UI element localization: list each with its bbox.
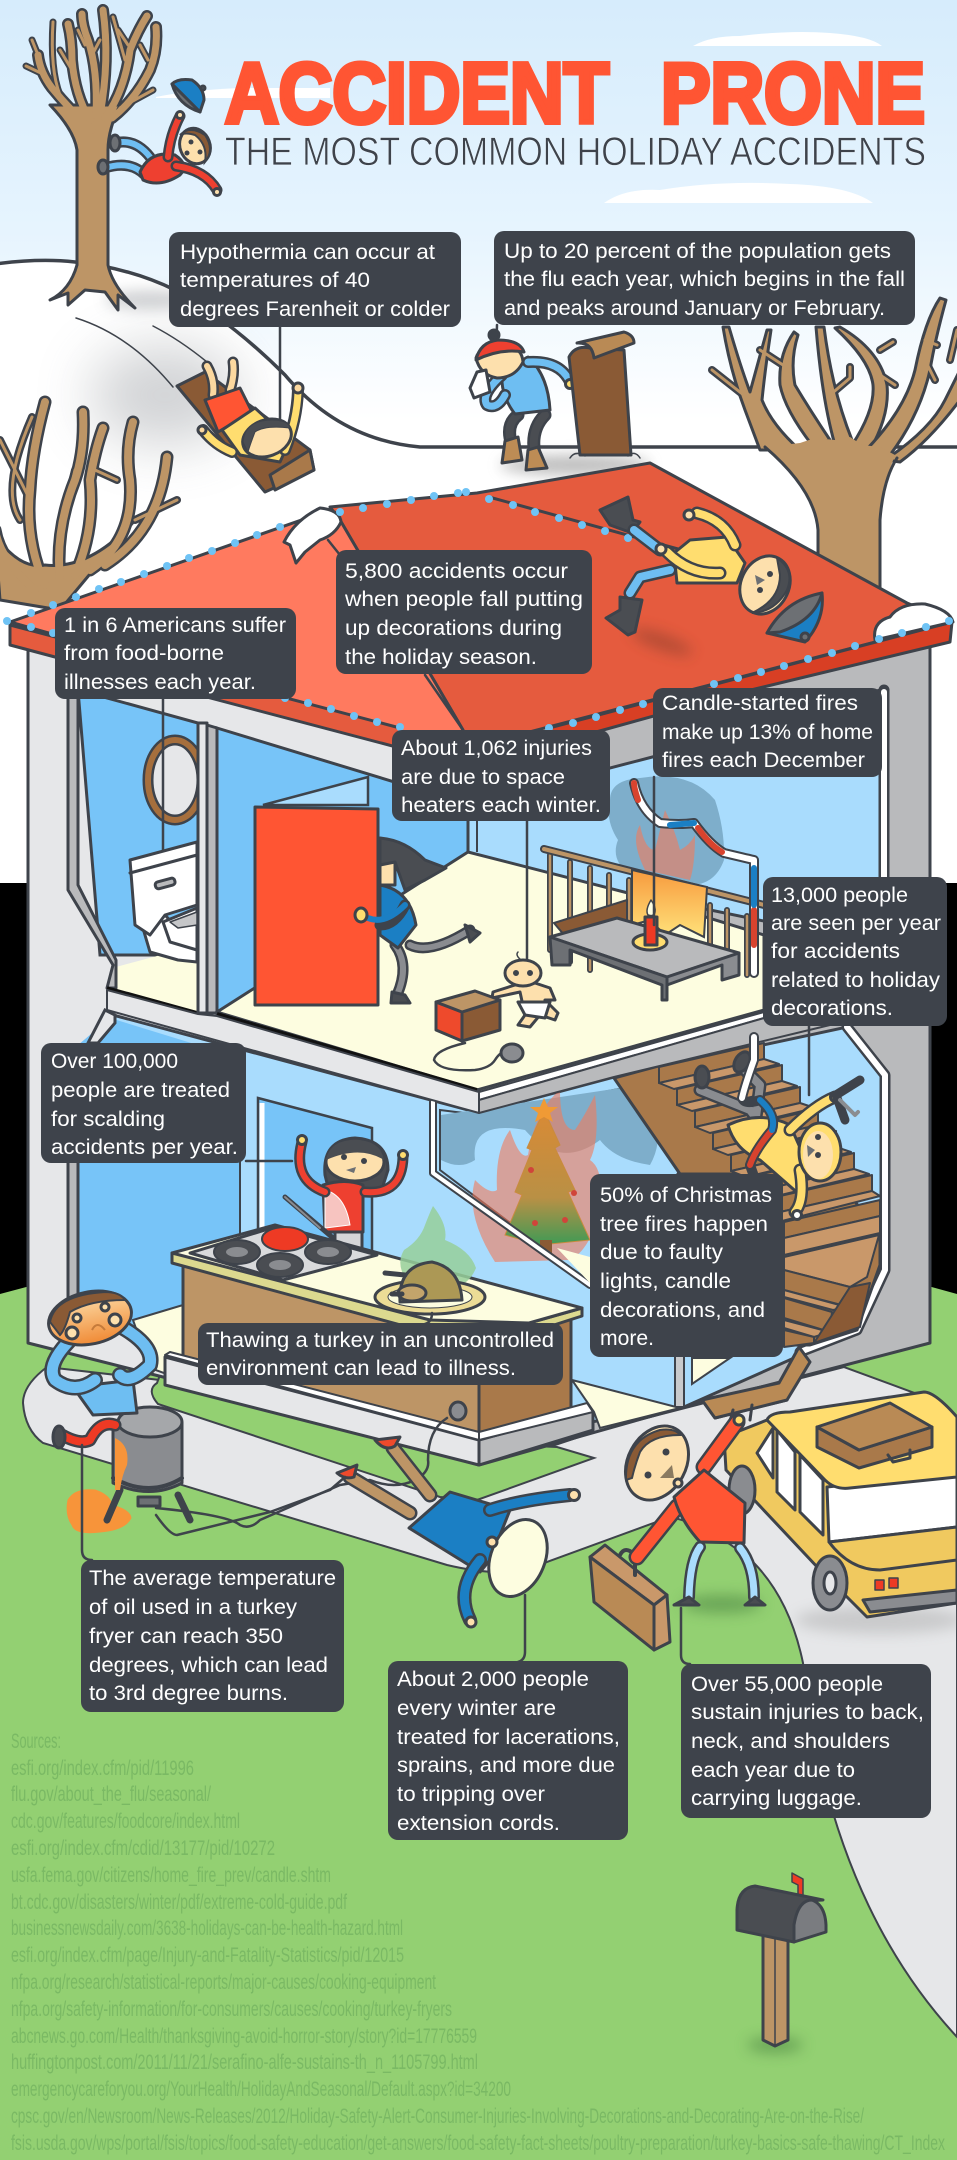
sources list: cdc.gov/features/foodcore/index.html bbox=[11, 1810, 240, 1833]
kitchen woman bbox=[285, 1136, 408, 1250]
bubble: hypothermia: temperatures of 40 bbox=[180, 269, 370, 292]
bubble: thawing turkey: environment can lead to illness. bbox=[206, 1357, 516, 1380]
stair railing bbox=[544, 849, 764, 975]
bubble: scalding: Over 100,000 bbox=[51, 1050, 178, 1073]
roof bbox=[10, 463, 952, 750]
baby bbox=[492, 952, 558, 1027]
bubble: luggage bbox=[681, 1664, 931, 1818]
cloud top right bbox=[693, 32, 882, 46]
lower suitcase bbox=[590, 1545, 670, 1650]
bubble: food-borne bbox=[55, 608, 296, 699]
bubble: 50 percent of tree fires: tree fires happen bbox=[600, 1213, 768, 1236]
sources list: nfpa.org/research/statistical-reports/major-causes/cooking-equipment bbox=[11, 1971, 436, 1994]
suitcase on car roof bbox=[817, 1403, 932, 1468]
bubble: extension cords: sprains, and more due bbox=[397, 1754, 615, 1777]
mailbox bbox=[737, 1873, 826, 2053]
bubble: space heaters: About 1,062 injuries bbox=[401, 737, 592, 760]
bubble: fryer oil bbox=[81, 1560, 344, 1712]
bubble: thawing turkey: Thawing a turkey in an uncontrolled bbox=[206, 1329, 554, 1352]
sources list bbox=[11, 1730, 945, 2155]
outlet and extension cord bbox=[156, 1402, 466, 1527]
sled tracks bbox=[76, 318, 207, 387]
tree: lower left bbox=[0, 402, 177, 610]
kitchen window bbox=[240, 1060, 372, 1295]
turkey fryer bbox=[107, 1407, 190, 1520]
floor slab bbox=[107, 990, 830, 1113]
bubble: decorations falls: the holiday season. bbox=[345, 646, 537, 669]
staircase bbox=[614, 1043, 880, 1347]
toboggan bbox=[569, 332, 640, 458]
roof snow bbox=[284, 508, 953, 640]
bubble: candle fires bbox=[653, 688, 882, 777]
bubble: extension cords: extension cords. bbox=[397, 1812, 560, 1835]
holiday garland bbox=[634, 783, 754, 973]
ground floor bbox=[133, 1305, 680, 1428]
bubble: holiday decorations: are seen per year bbox=[771, 912, 941, 935]
bubble: extension cords: every winter are bbox=[397, 1697, 556, 1720]
scared man bbox=[44, 1284, 151, 1448]
bubble: 50 percent of tree fires: decorations, and bbox=[600, 1299, 765, 1322]
title: Accident Prone: PRONE bbox=[661, 46, 925, 142]
bubble: hypothermia: degrees Farenheit or colder bbox=[180, 298, 450, 321]
bubble: thawing turkey bbox=[198, 1323, 563, 1385]
upper right wall trim bbox=[878, 690, 890, 940]
bubble: extension cords: to tripping over bbox=[397, 1783, 545, 1806]
counter and house base bbox=[165, 1352, 593, 1465]
cloud behind title bbox=[156, 88, 330, 98]
cloud lower right bbox=[604, 183, 873, 203]
car bbox=[724, 1392, 957, 1634]
sneezing man bbox=[470, 330, 650, 475]
bubble: hypothermia: Hypothermia can occur at bbox=[180, 241, 435, 264]
bubble: food-borne: 1 in 6 Americans suffer bbox=[64, 614, 286, 637]
stairs door frame bbox=[675, 1355, 730, 1407]
bubble: fryer oil: to 3rd degree burns. bbox=[89, 1682, 288, 1705]
bubble: scalding bbox=[41, 1043, 246, 1163]
house walls bbox=[28, 640, 930, 1465]
bubble: luggage: carrying luggage. bbox=[691, 1787, 862, 1810]
lower floor walls bbox=[68, 1010, 885, 1440]
doorway with smoke and burning tree bbox=[433, 1085, 680, 1285]
sources list: bt.cdc.gov/disasters/winter/pdf/extreme-cold-guide.pdf bbox=[11, 1891, 347, 1914]
bubble: flu: the flu each year, which begins in the fall bbox=[504, 268, 905, 291]
sky background bbox=[0, 0, 957, 420]
bubble: space heaters: are due to space bbox=[401, 766, 565, 789]
bubble: food-borne: illnesses each year. bbox=[64, 671, 256, 694]
bubble: decorations falls: 5,800 accidents occur bbox=[345, 560, 568, 583]
man falling down stairs bbox=[695, 1049, 860, 1220]
man falling from tree bbox=[98, 112, 220, 196]
sources list: usfa.fema.gov/citizens/home_fire_prev/candle.shtm bbox=[11, 1864, 331, 1887]
bubble: decorations falls: when people fall putting bbox=[344, 588, 583, 611]
bubble: luggage: each year due to bbox=[691, 1759, 855, 1782]
sources list: flu.gov/about_the_flu/seasonal/ bbox=[11, 1783, 211, 1806]
bubble: holiday decorations: for accidents bbox=[771, 940, 900, 963]
person behind door bbox=[355, 838, 480, 1003]
man with luggage bbox=[613, 1415, 765, 1613]
sledding boy bbox=[177, 362, 314, 492]
bubble: flu: Up to 20 percent of the population gets bbox=[504, 240, 891, 263]
bubble: fryer oil: The average temperature bbox=[89, 1567, 336, 1590]
bubble: 50 percent of tree fires: 50% of Christmas bbox=[600, 1184, 772, 1207]
bathroom bbox=[68, 690, 198, 1013]
christmas lights bbox=[3, 488, 953, 732]
bubble: space heaters: heaters each winter. bbox=[401, 794, 601, 817]
bubble: extension cords: About 2,000 people bbox=[397, 1668, 589, 1691]
bubble: holiday decorations: decorations. bbox=[771, 997, 893, 1020]
driveway bbox=[23, 1367, 957, 2037]
wall trim highlight bbox=[881, 692, 887, 940]
title: Accident Prone bbox=[225, 46, 925, 142]
turkey bbox=[375, 1206, 485, 1314]
mirror bbox=[148, 740, 202, 820]
tree: top left bbox=[26, 10, 156, 310]
garland wrapped around man bbox=[742, 1037, 773, 1185]
bubble: candle fires: fires each December bbox=[662, 749, 865, 772]
space heater bbox=[436, 991, 500, 1041]
toilet bbox=[130, 842, 197, 962]
bubble: 50 percent of tree fires: more. bbox=[600, 1327, 654, 1350]
bubble: holiday decorations: 13,000 people bbox=[771, 884, 908, 907]
sources list: esfi.org/index.cfm/cdid/13177/pid/10272 bbox=[11, 1837, 275, 1860]
burning curtain bbox=[632, 870, 707, 937]
bubble: fryer oil: degrees, which can lead bbox=[89, 1654, 328, 1677]
connector lines bbox=[82, 325, 809, 1664]
bubble: luggage: neck, and shoulders bbox=[691, 1730, 890, 1753]
sources list: esfi.org/index.cfm/pid/11996 bbox=[11, 1757, 194, 1780]
heater cord and plug bbox=[434, 1043, 523, 1070]
snowy ground bbox=[0, 260, 957, 890]
bubble: flu: and peaks around January or February. bbox=[504, 297, 885, 320]
bubble: hypothermia bbox=[169, 232, 461, 327]
bubble: scalding: accidents per year. bbox=[51, 1136, 238, 1159]
spilled oil bbox=[67, 1490, 131, 1533]
bubble: 50 percent of tree fires bbox=[590, 1174, 783, 1357]
bubble: flu bbox=[494, 231, 915, 325]
bubble: decorations falls bbox=[336, 550, 592, 674]
sources list: abcnews.go.com/Health/thanksgiving-avoid-horror-story/story?id=17776559 bbox=[11, 2025, 477, 2048]
bubble: holiday decorations: related to holiday bbox=[771, 969, 941, 992]
green lawn bbox=[0, 1286, 957, 2160]
bubble: luggage: sustain injuries to back, bbox=[691, 1701, 924, 1724]
sources list: esfi.org/index.cfm/page/Injury-and-Fatality-Statistics/pid/12015 bbox=[11, 1944, 404, 1967]
bubble: holiday decorations bbox=[763, 877, 947, 1026]
bubble: 50 percent of tree fires: lights, candle bbox=[600, 1270, 731, 1293]
bubble: 50 percent of tree fires: due to faulty bbox=[600, 1241, 724, 1264]
bubble: decorations falls: up decorations during bbox=[345, 617, 562, 640]
falling hat bbox=[172, 80, 205, 112]
fryer cord bbox=[156, 1477, 345, 1535]
coffee table and candle bbox=[550, 900, 739, 1000]
bubble: luggage: Over 55,000 people bbox=[691, 1673, 883, 1696]
title: Accident Prone: ACCIDENT bbox=[225, 46, 609, 142]
sources list: emergencycareforyou.org/YourHealth/HolidayAndSeasonal/Default.aspx?id=34200 bbox=[11, 2078, 511, 2101]
bubble: space heaters bbox=[392, 730, 610, 821]
sources list: nfpa.org/safety-information/for-consumers/causes/cooking/turkey-fryers bbox=[11, 1998, 452, 2021]
sources list: Sources: bbox=[11, 1730, 61, 1753]
fire, smoke and candle scene bbox=[609, 776, 724, 885]
man falling on roof bbox=[600, 497, 799, 660]
bubble: extension cords: treated for lacerations, bbox=[397, 1726, 620, 1749]
bubble: scalding: for scalding bbox=[51, 1108, 165, 1131]
red door with frame bbox=[255, 777, 378, 1005]
bubble: extension cords bbox=[388, 1661, 628, 1840]
black side bands bbox=[0, 883, 957, 1298]
partition wall bbox=[198, 723, 217, 1013]
bubble: fryer oil: fryer can reach 350 bbox=[89, 1625, 283, 1648]
lifted suitcase bbox=[702, 1347, 810, 1425]
sources list: businessnewsdaily.com/3638-holidays-can-be-health-hazard.html bbox=[11, 1917, 403, 1940]
sources list: huffingtonpost.com/2011/11/21/serafino-alfe-sustains-th_n_1105799.html bbox=[11, 2051, 478, 2074]
upstairs room bbox=[217, 690, 880, 1100]
bubble: candle fires: make up 13% of home bbox=[662, 721, 873, 744]
fallen hat on roof bbox=[767, 593, 822, 642]
tree: right bbox=[712, 298, 957, 620]
kitchen counter bbox=[172, 1225, 582, 1436]
bubble: fryer oil: of oil used in a turkey bbox=[89, 1596, 298, 1619]
bubble: food-borne: from food-borne bbox=[64, 642, 224, 665]
tripping man bbox=[337, 1437, 580, 1627]
bubble: candle fires: Candle-started fires bbox=[662, 692, 858, 715]
bubble: scalding: people are treated bbox=[51, 1079, 230, 1102]
